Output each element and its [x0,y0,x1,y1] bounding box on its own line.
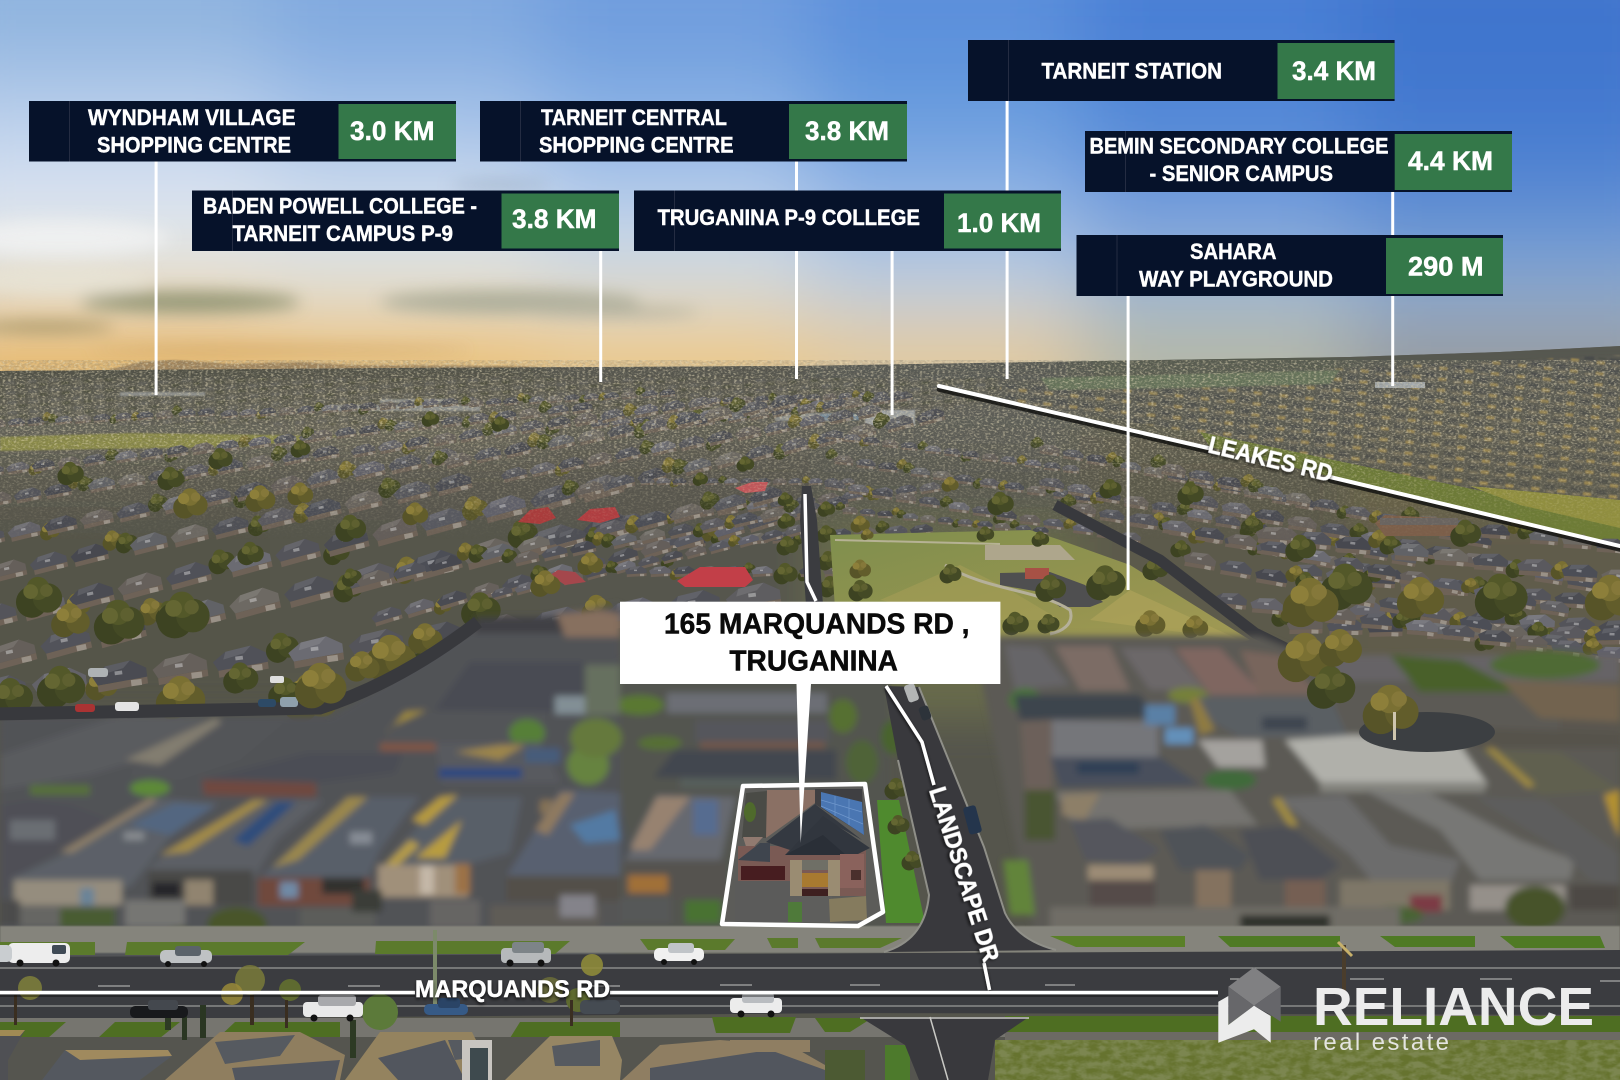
distance label: bemin college: 4.4 KM [1408,146,1493,176]
central street [800,486,823,605]
sky background [0,0,1620,430]
distance label: baden powell: TARNEIT CAMPUS P-9 [232,221,453,246]
address callout [620,602,1000,843]
blurred foreground [0,604,1620,960]
white roof house [1285,735,1488,785]
address callout: TRUGANINA [729,646,898,678]
cul-de-sac [1359,712,1495,752]
distance label: wyndham village: 3.0 KM [350,116,434,146]
entry door [802,873,828,887]
garden bed [829,896,867,922]
marquands road surface [0,950,1620,1020]
centre rows by road [625,476,947,581]
distance label: truganina college: 1.0 KM [957,208,1041,238]
park road [1055,505,1420,715]
south verges [0,1016,1620,1080]
logo: reliance real estate: real estate [1313,1029,1449,1056]
grass strips north [0,936,1605,955]
clouds [0,180,700,353]
driveway [735,881,790,922]
road label lines [0,386,1620,1003]
house walls [738,846,866,896]
plot base [722,784,883,926]
label: leakes rd: LEAKES RD [1206,432,1335,488]
distance label: tarneit station: TARNEIT STATION [1042,58,1222,83]
distance label: tarneit station: 3.4 KM [1292,56,1376,86]
distance label: truganina college: TRUGANINA P-9 COLLEGE [658,205,920,230]
distance label: tarneit central: SHOPPING CENTRE [539,133,734,158]
leader lines [155,101,1394,590]
distance label: wyndham village [29,101,456,162]
suburban rows left [0,385,946,718]
distance label: sahara playground: WAY PLAYGROUND [1139,267,1333,292]
front lawn [788,902,802,922]
landscape drive road [884,686,1056,952]
horizon building [1375,382,1425,388]
logo icon [1218,967,1281,1043]
distance label: wyndham village: WYNDHAM VILLAGE [88,105,296,130]
distance label: bemin college: BEMIN SECONDARY COLLEGE [1090,134,1388,158]
far field left [0,433,345,451]
distance label: tarneit central: TARNEIT CENTRAL [541,105,727,130]
lower big roofs right [1055,790,1258,830]
dark side area [815,789,864,835]
side road south [860,1017,1029,1080]
rear roof [766,790,815,838]
distance label: baden powell: BADEN POWELL COLLEGE - [203,194,477,218]
suburban rows right [822,427,1620,682]
ground base [0,340,1620,1080]
distance label: tarneit central [480,101,907,162]
centre blurred houses [667,693,827,713]
distance label: sahara playground: 290 M [1408,252,1484,282]
upper right-of-road rows [1005,645,1070,690]
trees mid-ground [0,411,1620,722]
front gable roof [785,816,870,855]
distance label: tarneit central: 3.8 KM [805,116,889,146]
distance label: truganina college [634,190,1061,251]
street and cars, left curve [0,622,478,714]
grass beside plot [877,800,925,923]
distance label: tarneit station [968,40,1395,101]
noise overlays [0,360,1620,529]
plot outline [722,784,883,926]
blur base right [975,636,1620,960]
coloured roofs [518,482,1458,587]
left tan roof [743,837,763,853]
label: landscape dr: LANDSCAPE DR [923,784,1004,965]
label: marquands rd: MARQUANDS RD [415,976,610,1003]
street frontage and verges [0,778,1620,955]
blur base left [0,604,620,960]
brick wall right [840,854,864,888]
distance label: bemin college [1085,131,1512,192]
park trees [850,560,871,578]
playground asphalt [1000,572,1103,607]
distance label: sahara playground [1076,235,1503,296]
right field and verge [1200,432,1620,546]
pillars [790,860,802,896]
bottom houses [0,1000,865,1080]
cars [0,942,782,1022]
distance label: baden powell [192,190,619,251]
solar panels [821,792,864,835]
logo: reliance real estate: RELIANCE [1313,977,1594,1037]
far field right [1040,370,1340,390]
distance label: wyndham village: SHOPPING CENTRE [97,133,291,158]
leakes rd line [939,386,1620,550]
distant hills [100,360,620,372]
front two-storey houses right [1070,818,1160,865]
address callout: 165 MARQUANDS RD , [664,608,970,640]
marquands rd line [0,991,1218,997]
landscape dr line [886,686,990,990]
distance label: bemin college: - SENIOR CAMPUS [1150,161,1333,186]
left small roof [738,843,770,862]
park [830,526,1250,648]
logo: reliance real estate [1218,967,1594,1056]
parked cars on landscape [903,682,982,835]
far suburbs texture [1000,354,1620,499]
subject house plot [722,784,883,926]
street trees [14,930,1352,1030]
distance label: sahara playground: SAHARA [1190,239,1276,264]
hip roof [766,804,862,850]
blur base centre [620,660,890,960]
garage door [741,866,785,880]
left blurred upper houses [475,617,573,633]
left blurred main houses [0,800,110,905]
distance label: baden powell: 3.8 KM [512,204,596,234]
central road line [805,494,816,601]
far white buildings [120,392,915,426]
courtyard [742,791,767,838]
sharp trees at road [1278,629,1419,740]
